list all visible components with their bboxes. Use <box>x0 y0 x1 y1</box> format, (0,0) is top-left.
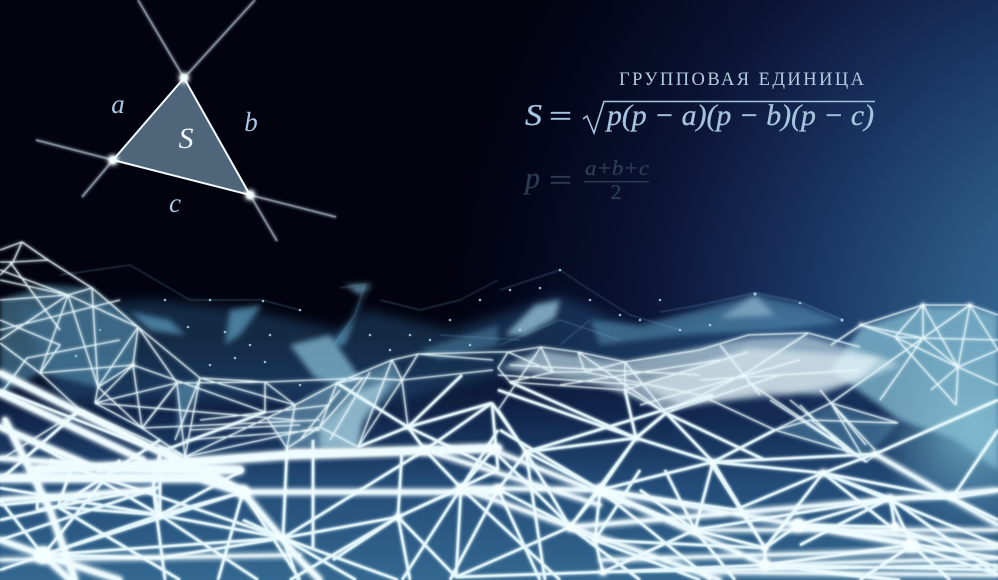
foreground network mesh: medium lines <box>0 375 998 580</box>
semi-perimeter formula: p <box>523 160 540 195</box>
semi-perimeter formula: 2 <box>611 180 621 204</box>
side label a: a <box>111 89 125 119</box>
foreground network nodes <box>35 304 972 575</box>
triangle diagram with sides a, b, c and area S <box>36 0 336 241</box>
mid network mesh: fills <box>0 285 998 470</box>
area label S: S <box>178 122 194 155</box>
side label c: c <box>169 188 181 218</box>
Heron formula: S <box>525 97 542 132</box>
semi-perimeter formula: = <box>549 162 572 197</box>
Heron formula: = <box>549 98 572 133</box>
semi-perimeter formula <box>523 156 650 204</box>
mid network mesh: thin lines <box>0 242 998 462</box>
far network mesh <box>20 265 844 400</box>
semi-perimeter formula: a+b+c <box>585 156 650 180</box>
extension lines of triangle sides <box>36 0 336 241</box>
triangle vertices <box>109 74 254 199</box>
triangle <box>113 78 250 195</box>
side label b: b <box>244 107 258 137</box>
foreground network mesh: thick glowing bands <box>0 373 998 580</box>
heading: ГРУППОВАЯ ЕДИНИЦА <box>619 70 865 90</box>
Heron formula: p(p − a)(p − b)(p − c) <box>605 99 874 132</box>
